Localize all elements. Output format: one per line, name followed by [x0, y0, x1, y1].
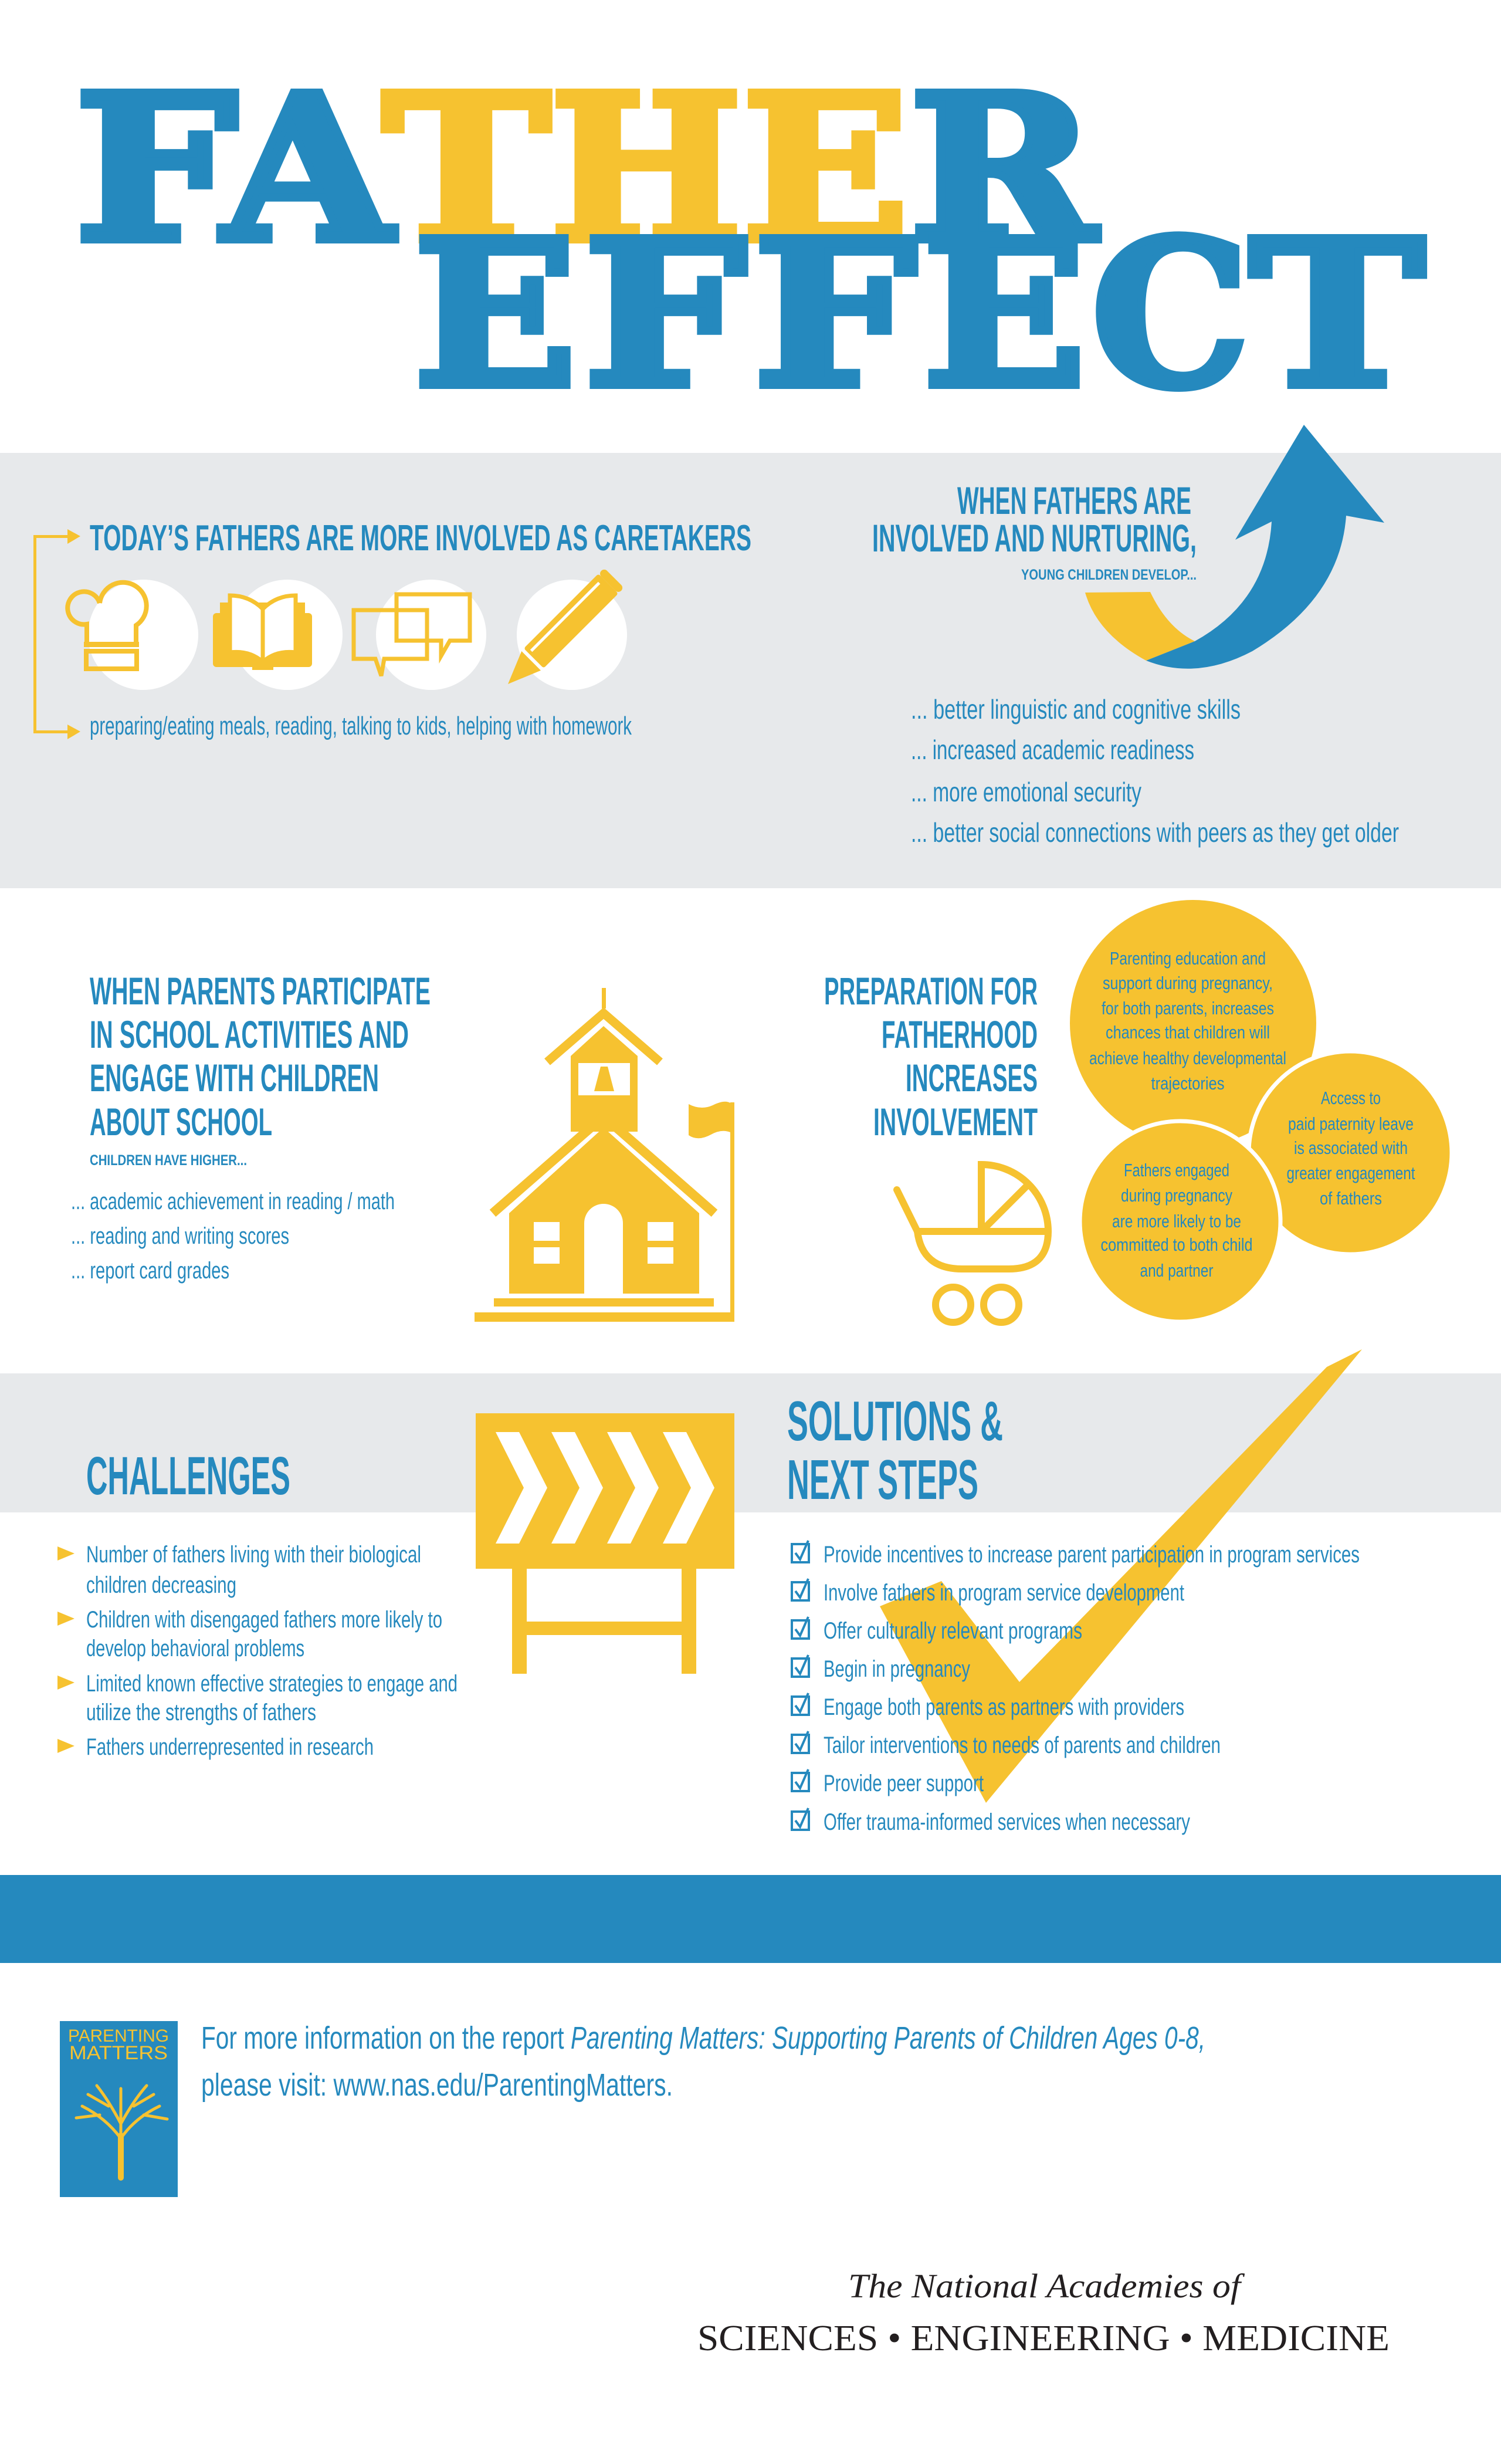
list: school outcomes: ... reading and writing scores	[71, 1223, 289, 1249]
title: FATHER EFFECT: A	[219, 50, 397, 287]
circle: paid paternity leave: paid paternity leave	[1288, 1113, 1414, 1134]
circle: paid paternity leave: of fathers	[1320, 1188, 1382, 1209]
title: FATHER EFFECT: E	[742, 50, 909, 287]
heading: solutions & next steps: NEXT STEPS	[787, 1448, 978, 1511]
circle: fathers engaged during pregnancy: and partner	[1140, 1260, 1213, 1281]
list: solutions: Engage both parents as partners with providers	[824, 1694, 1184, 1720]
title: FATHER EFFECT: F	[74, 50, 238, 287]
list: solutions	[792, 1541, 1360, 1835]
panel: gray band challenges	[0, 1373, 1501, 1512]
title: FATHER EFFECT: F	[753, 196, 917, 432]
panel: preparation for fatherhood	[824, 900, 1452, 1322]
list: solutions: Begin in pregnancy	[824, 1656, 970, 1682]
icon: Parenting Matters book cover: MATTERS	[69, 2042, 168, 2063]
heading: INVOLVEMENT	[873, 1100, 1038, 1143]
list: outcomes	[911, 694, 1399, 848]
panel: parents participate in school	[71, 969, 734, 1322]
list: solutions: Involve fathers in program service development	[824, 1580, 1184, 1606]
panel: fathers involved as caretakers	[33, 518, 751, 740]
list: challenges	[57, 1542, 458, 1760]
bracket arrows	[33, 529, 80, 739]
heading: ABOUT SCHOOL	[90, 1100, 272, 1143]
heading: solutions & next steps: SOLUTIONS &	[787, 1390, 1003, 1453]
list: solutions: Provide peer support	[824, 1771, 984, 1796]
heading: WHEN FATHERS ARE	[957, 479, 1191, 522]
list: challenges: Number of fathers living with their biological	[86, 1542, 421, 1568]
circle: parenting education: for both parents, increases	[1102, 998, 1274, 1018]
title: FATHER EFFECT: F	[584, 196, 747, 432]
icon: road sign with chevrons	[476, 1413, 734, 1674]
heading: ENGAGE WITH CHILDREN	[90, 1056, 379, 1099]
heading	[90, 969, 431, 1169]
list: outcomes: ... better linguistic and cognitive skills	[911, 694, 1241, 725]
icon: chef hat	[67, 583, 147, 669]
circle: fathers engaged during pregnancy	[1080, 1121, 1280, 1322]
icon: speech bubbles	[354, 594, 470, 676]
icon: Parenting Matters book cover: PARENTING	[68, 2026, 169, 2046]
circle: paid paternity leave: is associated with	[1294, 1138, 1408, 1158]
heading: INCREASES	[906, 1056, 1038, 1099]
title: FATHER EFFECT: E	[923, 196, 1086, 432]
title: FATHER EFFECT: H	[550, 50, 742, 287]
heading	[824, 969, 1038, 1143]
heading	[872, 479, 1197, 583]
icon: stroller	[897, 1165, 1048, 1322]
list: school outcomes: ... report card grades	[71, 1258, 229, 1284]
list: solutions: Tailor interventions to needs of parents and children	[824, 1732, 1221, 1758]
text: more information: For more information on the report Parenting Matters: Supporting Parents of Children Ages 0-8,	[201, 2020, 1205, 2056]
icon: book	[213, 595, 312, 670]
logo: National Academies	[697, 2267, 1390, 2358]
heading: solutions & next steps	[787, 1390, 1003, 1511]
list: challenges: children decreasing	[86, 1572, 236, 1598]
list: solutions: Offer culturally relevant programs	[824, 1618, 1082, 1644]
circle: parenting education: support during pregnancy,	[1103, 973, 1273, 993]
heading: WHEN PARENTS PARTICIPATE	[90, 969, 431, 1013]
icon: upward curved arrow	[1085, 425, 1384, 669]
title: FATHER EFFECT: C	[1092, 196, 1249, 432]
heading: CHILDREN HAVE HIGHER...	[90, 1152, 247, 1169]
circle: fathers engaged during pregnancy: during pregnancy	[1121, 1185, 1232, 1206]
list: school outcomes	[71, 1189, 395, 1284]
blue band	[0, 1875, 1501, 1963]
list: challenges: develop behavioral problems	[86, 1636, 304, 1661]
icon: schoolhouse	[475, 988, 734, 1322]
heading: YOUNG CHILDREN DEVELOP...	[1021, 567, 1197, 583]
heading: PREPARATION FOR	[824, 969, 1038, 1013]
heading: INVOLVED AND NURTURING,	[872, 516, 1197, 560]
icon: pencil	[498, 568, 624, 694]
list: outcomes: ... increased academic readiness	[911, 735, 1194, 765]
heading: TODAY’S FATHERS ARE MORE INVOLVED AS CARETAKERS	[90, 518, 751, 559]
circle: fathers engaged during pregnancy: Fathers engaged	[1124, 1160, 1229, 1180]
circle: fathers engaged during pregnancy: are more likely to be	[1112, 1211, 1241, 1231]
panel: when fathers are involved	[872, 425, 1399, 848]
heading: IN SCHOOL ACTIVITIES AND	[90, 1013, 409, 1056]
title: FATHER EFFECT: T	[382, 50, 550, 287]
heading: FATHERHOOD	[882, 1013, 1038, 1056]
circle: paid paternity leave	[1249, 1051, 1452, 1254]
text: more information: please visit: www.nas.edu/ParentingMatters.	[201, 2067, 673, 2103]
list: solutions: Offer trauma-informed services when necessary	[824, 1809, 1190, 1835]
logo: National Academies: The National Academies of	[848, 2267, 1245, 2305]
circle: parenting education: chances that children will	[1106, 1022, 1270, 1043]
circle: parenting education: Parenting education and	[1110, 948, 1266, 969]
title: FATHER EFFECT: E	[414, 196, 577, 432]
icon: big checkmark	[880, 1349, 1362, 1803]
title: FATHER EFFECT	[74, 50, 1425, 432]
circle: parenting education: achieve healthy developmental	[1089, 1048, 1286, 1068]
panel: gray band caretakers	[0, 453, 1501, 888]
circle: fathers engaged during pregnancy: committed to both child	[1100, 1234, 1253, 1255]
caption: preparing/eating meals, reading, talking to kids, helping with homework	[90, 712, 632, 740]
title: FATHER EFFECT: T	[1249, 196, 1425, 432]
title: FATHER EFFECT: R	[909, 50, 1099, 287]
circle: parenting education: trajectories	[1151, 1073, 1225, 1094]
circle: paid paternity leave: Access to	[1321, 1088, 1381, 1108]
list: outcomes: ... more emotional security	[911, 777, 1141, 807]
circle: parenting education	[1070, 900, 1316, 1146]
list: school outcomes: ... academic achievement in reading / math	[71, 1189, 395, 1214]
list: challenges: utilize the strengths of fathers	[86, 1700, 316, 1725]
list: challenges: Limited known effective strategies to engage and	[86, 1671, 458, 1697]
logo: National Academies: SCIENCES • ENGINEERING • MEDICINE	[697, 2319, 1390, 2358]
circle: paid paternity leave: greater engagement	[1287, 1163, 1415, 1183]
icon: Parenting Matters book cover	[60, 2021, 178, 2197]
text: more information	[201, 2020, 1205, 2103]
list: challenges: Children with disengaged fathers more likely to	[86, 1607, 442, 1633]
list: challenges: Fathers underrepresented in research	[86, 1734, 374, 1760]
heading: challenges: CHALLENGES	[86, 1446, 290, 1506]
icon circles	[88, 580, 627, 690]
